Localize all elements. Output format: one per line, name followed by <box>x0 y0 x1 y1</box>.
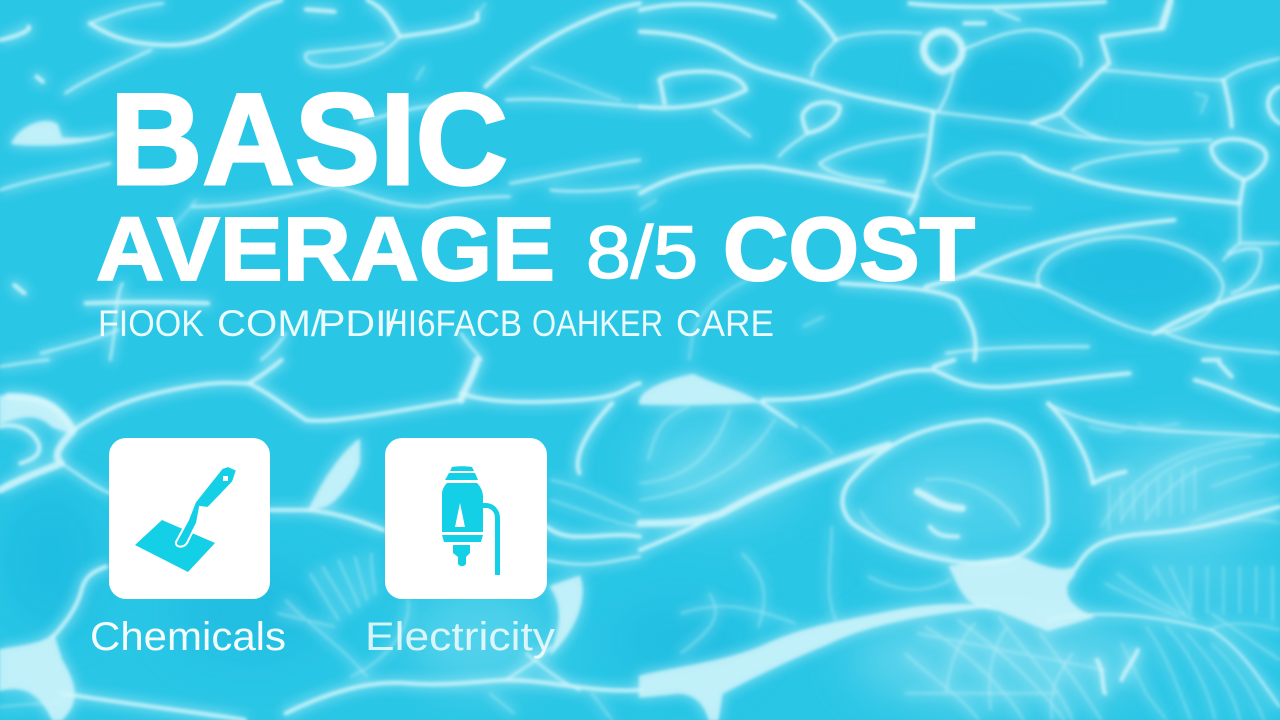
icon: trowel <box>135 466 237 572</box>
heading: average 8/5 cost: 8/5 <box>586 211 698 294</box>
top-left network <box>0 0 640 360</box>
icon: water heater pump <box>442 466 500 575</box>
title: BASIC: BASIC <box>110 66 508 212</box>
heading: average 8/5 cost <box>96 200 975 300</box>
subtitle: CARE <box>676 303 774 344</box>
subtitle: PDI/ <box>318 303 399 344</box>
subtitle: OAHKER <box>532 303 663 344</box>
panel: electricity <box>365 438 555 659</box>
bottom-right network <box>640 360 1280 720</box>
label: chemicals: Chemicals <box>90 615 286 659</box>
subtitle: COM/ <box>217 303 323 344</box>
subtitle <box>98 303 774 344</box>
top-right network <box>640 0 1280 360</box>
subtitle: HI6FACB <box>384 303 522 344</box>
subtitle: FIOOK <box>98 303 204 344</box>
panel: chemicals <box>90 438 286 659</box>
label: electricity: Electricity <box>365 615 555 659</box>
heading: average 8/5 cost: COST <box>723 200 975 300</box>
bottom-left network <box>0 360 640 720</box>
icon tile: electricity <box>385 438 547 599</box>
icon tile: chemicals <box>109 438 270 599</box>
heading: average 8/5 cost: AVERAGE <box>96 200 555 300</box>
